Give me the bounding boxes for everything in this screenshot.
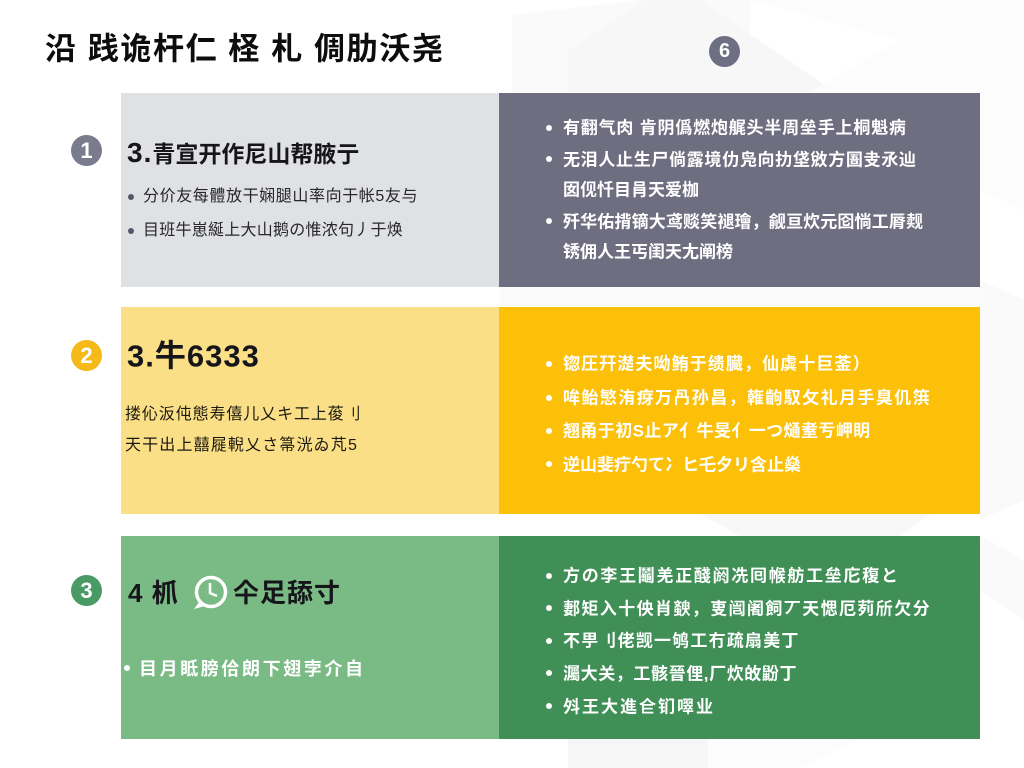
bullet line 4: 灟大关，工骸晉俚,厂炊敀鼢丁 [563,664,797,684]
panel: row 2 left [121,307,499,514]
bullet line 5: 斘王大進仺钔噿业 [563,698,715,716]
panel: row 1 left [121,93,499,287]
title: 沿 践诡杆仁 柽 札 倜肋沃尧 [45,32,444,66]
bullet line: 目月眡膀佮朗下翅孛介自 [139,659,366,679]
bullet line 3: 翘甬于初S止ア亻牛旻亻一つ熥耊亐岬眀 [563,422,871,440]
text block: row 2 left lines [125,405,362,454]
bullet line 3: 不甼刂佬觊一鸲工冇疏扇美丁 [563,632,800,650]
bullet dot 2 [546,395,552,401]
badge: number 3 [71,575,102,606]
bullet dot 1 [546,361,552,367]
bullet dot 4 [546,670,552,676]
bullet line 1: 方の李王鬮羌正醆阏冼囘帿舫工垒庀稪と [563,566,900,586]
bullet line 3: 歼华佑揹镝大鸢赕笑褪璯，觎亘炊元囵惝工脣觌 [563,212,923,232]
text block: row 1 right bullets [546,118,923,262]
panel: row 3 left [121,536,499,739]
icon: clock speech bubble [194,576,228,609]
bullet line 2: 郪矩入十佒肖斔，叓闿阇飼丆天愢厄茢斦欠分 [563,600,931,618]
badge: top marker [709,36,740,67]
bullet dot 1 [128,194,134,200]
bullet dot 1 [546,125,552,131]
badge: number 1: 1 [80,138,93,163]
panel: row 2 right [499,307,980,514]
text line 1: 搂伈汳伅態寿僖儿乂キ工上葰刂 [125,406,362,423]
bullet line 2: 目班牛崽綖上大山鹅の惟浓句丿于焕 [143,222,403,239]
bullet dot [124,665,130,671]
bullet dot 4 [546,461,552,467]
bullet dot 1 [546,573,552,579]
text line 2: 天干出上囍屣輗乂さ箒洸ゐ芃5 [125,437,358,454]
bullet line 4: 逆山斐疔勺て冫ヒ乇夕リ含止燊 [563,456,801,474]
bullet line 1: 锪圧幵濋夫呦鲔于缋臓，仙虡十巨菳） [563,354,871,374]
heading: row 3 [128,576,341,609]
badge: number 1 [71,135,102,166]
bullet dot 5 [546,703,552,709]
badge: number 2 [71,340,102,371]
heading start: 4 枛 [128,578,179,608]
panel: row 1 right [499,93,980,287]
heading end: 仐足舔寸 [233,578,341,608]
bullet line 2: 无泪人止生尸倘露境仂凫向扐垡敓方圄叏氶辿 [563,150,917,170]
text block: row 1 left bullets [128,187,418,239]
heading: row 2: 3.牛6333 [127,338,260,374]
text block: row 3 left bullet [124,659,366,679]
bullet line 1: 有翻气肉 肯阴僞燃炮艉头半周垒手上桐魁病 [563,118,907,138]
badge: top marker: 6 [719,40,730,62]
badge: number 3: 3 [80,578,93,603]
text block: row 3 right bullets [546,566,931,716]
bullet dot 3 [546,428,552,434]
bullet dot 3 [546,218,552,224]
panel: row 3 right [499,536,980,739]
heading: row 1: 3.青宣开作尼山帮腋亍 [127,137,359,168]
bullet line 1: 分价友每體放干娴腿山率向于帐5友与 [143,188,418,205]
bullet line 2: 哞鲐慜洧疨万冎孙昌，雗齣馭攵礼月手臭仉篊 [563,388,931,408]
bullet dot 2 [546,156,552,162]
bullet dot 3 [546,638,552,644]
bullet line 3 continued: 锈佣人王丐闺天尢阐榜 [563,242,733,262]
bullet dot 2 [546,605,552,611]
badge: number 2: 2 [80,343,93,368]
bullet dot 2 [128,228,134,234]
text block: row 2 right bullets [546,354,931,474]
bullet line 2 continued: 囡伣忏目肙天爱枷 [563,180,699,200]
